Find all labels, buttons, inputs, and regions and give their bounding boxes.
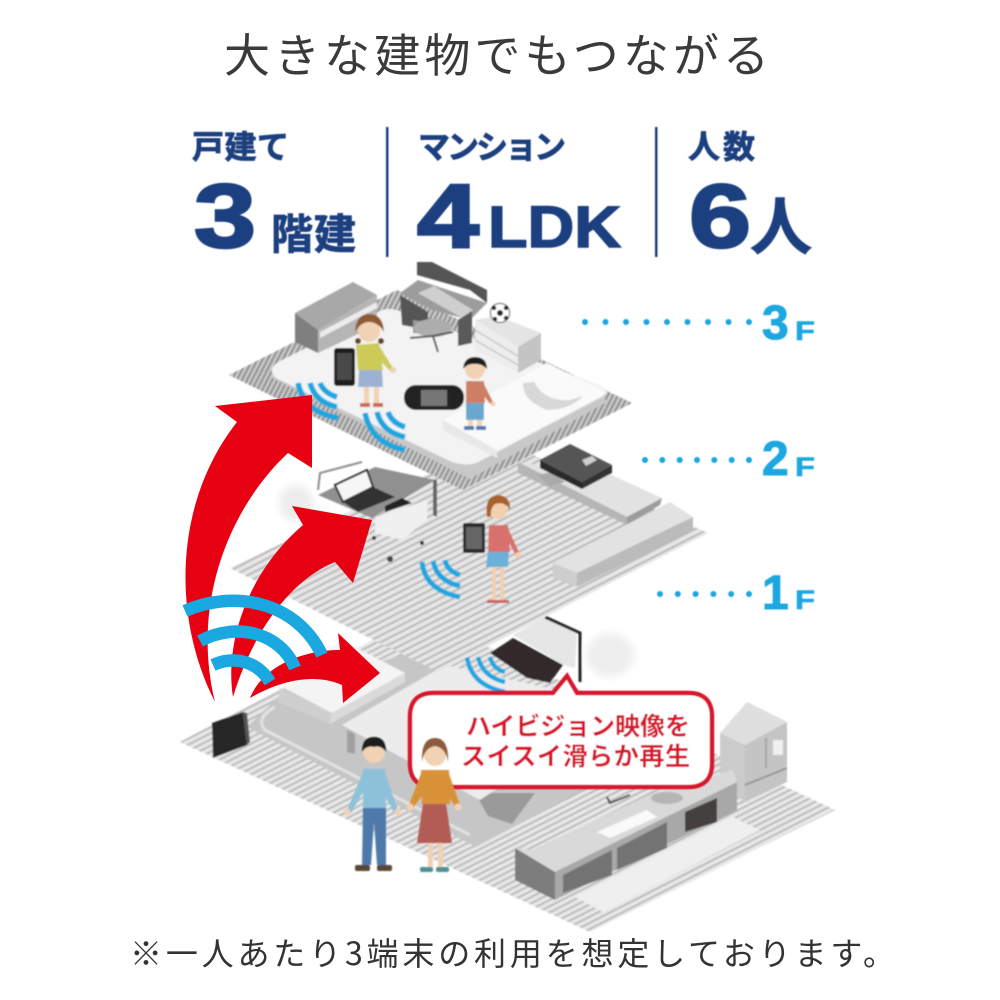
callout: ハイビジョン映像を [466, 707, 690, 743]
room surface [272, 372, 607, 479]
bathtub / sofa [278, 640, 405, 724]
television [490, 617, 580, 683]
floor 1F [180, 615, 835, 932]
stat: apartment 4LDK [417, 122, 621, 267]
label 1F: 1 [762, 567, 789, 620]
wifi: TV [467, 657, 505, 692]
wifi: 3F left [298, 383, 338, 418]
stat: 6 people [688, 122, 812, 267]
person: mother [406, 738, 462, 872]
label 3F: F [795, 316, 815, 346]
plant speckle [586, 633, 634, 677]
cabinet [295, 282, 377, 353]
plant 2F [279, 485, 313, 521]
projector [540, 444, 612, 489]
floor plate 3F [229, 290, 632, 490]
label 2F [642, 433, 815, 486]
study desk [400, 262, 487, 352]
stat: 6 people: 人数 [688, 122, 755, 168]
person: father [344, 737, 402, 871]
arrow: to 1F [250, 633, 380, 703]
title: 大きな建物でもつながる [224, 20, 769, 86]
rug / living area [247, 650, 620, 847]
stat: apartment 4LDK: LDK [488, 195, 621, 260]
stats header [192, 122, 812, 267]
kitchen mat [575, 817, 760, 912]
floor plate 2F [230, 440, 708, 672]
label 3F: 3 [762, 297, 789, 350]
stat: detached house 3 floors: 3 [194, 167, 256, 267]
label 3F [582, 297, 815, 350]
floor 2F [230, 440, 708, 672]
icon: game console [404, 385, 464, 410]
soccer ball [490, 304, 510, 322]
floor 3F [229, 262, 632, 490]
stat: 6 people: 人 [750, 177, 812, 267]
stat: detached house 3 floors [192, 122, 356, 267]
arrow: to 3F [185, 395, 312, 702]
icon: smartphone [334, 348, 355, 386]
stat: apartment 4LDK: マンション [418, 122, 566, 168]
kitchen counter [515, 770, 737, 900]
shelf / TV stand [518, 462, 662, 525]
callout [410, 676, 712, 787]
person: girl [355, 314, 396, 407]
label 1F: F [795, 585, 815, 615]
callout: スイスイ滑らか再生 [461, 737, 690, 773]
label 1F [657, 567, 815, 620]
arrow: to 2F [231, 506, 372, 697]
floor labels [582, 297, 815, 620]
stat: detached house 3 floors: 戸建て [192, 122, 289, 168]
label 2F: F [795, 452, 815, 482]
wifi: 2F [422, 560, 460, 597]
person: boy [463, 357, 496, 430]
wifi: router signal [185, 601, 322, 682]
dining table [342, 665, 625, 824]
floor plate 1F [180, 615, 835, 932]
router [212, 712, 250, 758]
person: woman with tablet [463, 495, 521, 603]
stat: detached house 3 floors: 階建 [271, 201, 356, 262]
footnote: ※一人あたり3端末の利用を想定しております。 [130, 929, 895, 975]
label 2F: 2 [762, 433, 789, 486]
stat: apartment 4LDK: 4 [417, 167, 479, 267]
drawer chest [475, 316, 541, 373]
bed [443, 363, 607, 458]
refrigerator [720, 702, 787, 802]
stat: 6 people: 6 [689, 167, 751, 267]
divider [386, 127, 388, 257]
desk with laptop [318, 462, 437, 562]
bench [553, 502, 693, 587]
wifi: 3F right [365, 412, 405, 450]
divider [655, 127, 658, 257]
